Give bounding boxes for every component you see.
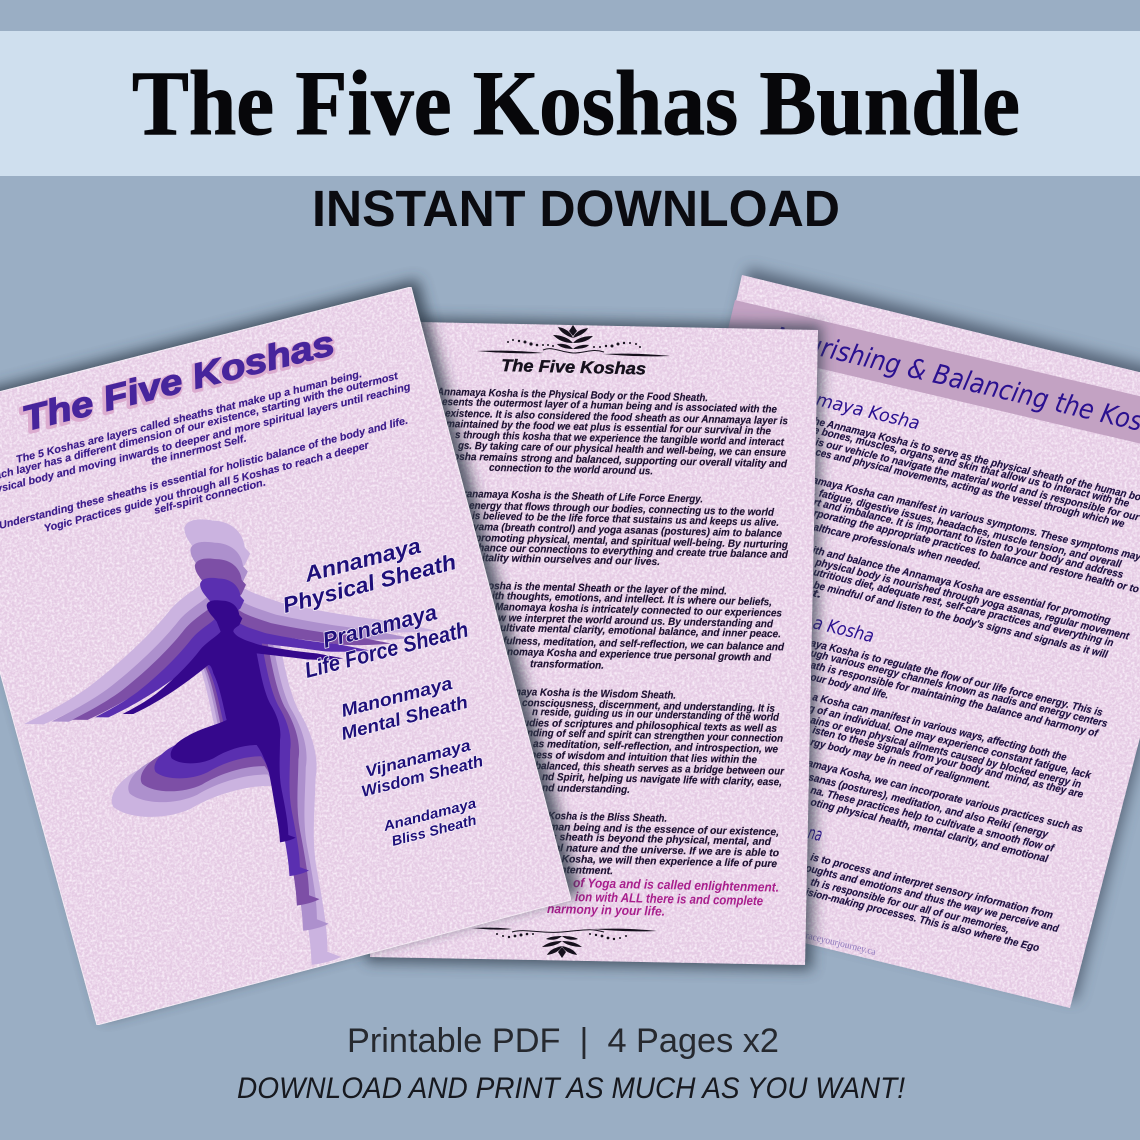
mini title: The Five Koshas — [501, 356, 646, 379]
text block: Anandamaya summary: Kosha is the Bliss Sheath. — [548, 810, 667, 825]
sheath labels: Anandamaya — [381, 795, 478, 834]
text block: Pranamaya: oting physical health, mental clarity, and emotional — [809, 796, 1050, 866]
intro text: Understanding these sheaths is essential for holistic balance of the body and life. — [0, 415, 409, 532]
section heading: Pranamaya Kosha: a Kosha — [811, 612, 876, 647]
text block: Vijnanamaya summary: n reside, guiding us in our understanding of the world — [532, 706, 780, 724]
sheath labels: Pranamaya — [320, 599, 440, 653]
text block: Vijnanamaya summary: nd Spirit, helping us navigate life with clarity, ease, — [542, 771, 782, 788]
text block: Pranamaya: isten to these signals from your body and mind, as they are — [811, 724, 1085, 801]
text block: Pranamaya: rgy body may be in need of realignment. — [809, 736, 992, 791]
sheath labels: Mental Sheath — [339, 692, 470, 744]
text block: Anandamaya summary: ntentment. — [560, 864, 613, 877]
text block: Pranamaya: ath is responsible for maintaining the balance and harmony of — [809, 659, 1100, 740]
text block: Annamaya: physical body is nourished through yoga asanas, regular movement — [813, 556, 1131, 643]
page title: The Five Koshas — [19, 324, 338, 439]
text block: Pranamaya: na. These practices help to cultivate a smooth flow of — [809, 784, 1056, 855]
ornament: top — [477, 325, 670, 356]
text block: Vijnanamaya summary — [515, 686, 785, 796]
page title: The Five Koshas — [17, 325, 338, 441]
text block: Manomaya summary: Manomaya kosha is intricately connected to our experiences — [495, 601, 782, 620]
text block: Annamaya summary: gs. By taking care of our physical health and well-being, we can ensure — [457, 440, 786, 459]
text block: Annamaya: utritious diet, adequate rest, self-care practices and everything in — [812, 566, 1115, 649]
text block: Pranamaya summary: energy that flows through our bodies, connecting us to the world — [469, 500, 775, 519]
text block: Annamaya: , fatigue, digestive issues, headaches, muscle tension, and overall — [811, 486, 1124, 571]
text block: Annamaya: be mindful of and listen to the body's signs and signals as it will — [812, 579, 1110, 661]
text block: Manomaya summary: nomaya Kosha and experience true personal growth and — [507, 646, 772, 664]
text block: Annamaya: rt and imbalance. It is important to listen to your body and address — [812, 496, 1125, 581]
text block: Annamaya summary: connection to the world around us. — [489, 462, 653, 477]
text block: Annamaya summary: existence. It is also considered the food sheath as our Annamaya layer is — [445, 408, 788, 427]
panel: middle page — [366, 318, 822, 970]
section heading: Manomaya fragment: na — [806, 822, 824, 846]
text block: Vijnanamaya summary: consciousness, discernment, and understanding. It is — [522, 697, 775, 715]
text block: Manomaya summary: transformation. — [530, 658, 604, 672]
sheath labels: Physical Sheath — [280, 549, 459, 618]
text block: Pranamaya: ains or even physical ailments caused by blocked energy in — [809, 714, 1082, 791]
heading band — [724, 300, 1140, 467]
text block: Anandamaya summary: uman being and is the essence of our existence, — [543, 821, 779, 838]
footer url: raceyourjourney.ca — [804, 930, 877, 958]
text block: Annamaya: althcare professionals when needed. — [812, 521, 983, 573]
text block: Annamaya summary: Annamaya Kosha is the Physical Body or the Food Sheath. — [436, 386, 708, 404]
text block: Anandamaya summary: ual nature and the universe. If we are is able to — [548, 842, 780, 859]
sheath labels: Life Force Sheath — [302, 617, 471, 683]
pink closing text: of Yoga and is called enlightenment. — [573, 875, 779, 895]
subtitle: INSTANT DOWNLOAD — [312, 180, 840, 237]
text block: Manomaya summary: ultivate mental clarity, emotional balance, and inner peace. — [500, 622, 781, 640]
text block: Annamaya summary: maintained by the food we eat plus is essential for our survival in the — [446, 418, 771, 437]
text block: Annamaya summary: s through this kosha that we experience the tangible world and interact — [455, 429, 785, 448]
sheath labels: Wisdom Sheath — [360, 753, 485, 801]
text block: Manomaya summary — [488, 580, 785, 672]
text block: Anandamaya summary: a Kosha, we will then experience a life of pure — [553, 853, 777, 870]
text block: Anandamaya summary: is sheath is beyond the physical, mental, and — [548, 831, 772, 848]
intro text: Yogic Practices guide you through all 5 Koshas to reach a deeper — [43, 439, 371, 535]
text block: Pranamaya: our body and life. — [809, 671, 890, 702]
text block: Vijnanamaya summary: udies of scriptures and philosophical texts as well as — [523, 717, 777, 735]
text block: Manomaya: th is responsible for our all of our memories, — [809, 876, 1010, 936]
text block: Annamaya summary: esents the outermost layer of a human being and is associated with the — [442, 396, 777, 416]
figure: layered silhouette in tree pose — [19, 516, 439, 967]
text block: Pranamaya summary: ranamaya Kosha is the Sheath of Life Force Energy. — [463, 488, 703, 505]
ornament: bottom — [472, 928, 657, 958]
intro text: the innermost Self. — [150, 433, 248, 468]
text block: Pranamaya: sanas (postures), meditation, and also Reiki (energy — [807, 771, 1050, 841]
text block: Annamaya — [811, 415, 1140, 661]
text block: Pranamaya summary: promoting physical, mental, and spiritual well-being. By nurturing — [474, 532, 789, 551]
caption: format: Printable PDF | 4 Pages x2 — [347, 1022, 779, 1060]
text block: Vijnanamaya summary: ness of wisdom and intuition that lies within the — [530, 749, 757, 766]
sheath labels: Annamaya — [301, 533, 423, 587]
sheath labels: Manonmaya — [339, 673, 454, 721]
text block: Anandamaya summary — [543, 810, 780, 877]
text block: Pranamaya: amaya Kosha, we can incorporate various practices such as — [806, 757, 1084, 835]
text block: Vijnanamaya summary: as meditation, self-reflection, and introspection, we — [533, 738, 778, 756]
intro text — [0, 368, 412, 535]
intro text: The 5 Koshas are layers called sheaths that make up a human being. — [15, 368, 363, 466]
text block: Pranamaya: a Kosha can manifest in various ways, affecting both the — [811, 691, 1068, 764]
caption: call to action: DOWNLOAD AND PRINT AS MUCH AS YOU WANT! — [237, 1072, 906, 1105]
text block: Pranamaya summary: yama (breath control) and yoga asanas (postures) aim to balance — [472, 521, 782, 540]
text block: Annamaya summary — [436, 386, 788, 477]
text block: Manomaya summary: fulness, meditation, and self-reflection, we can balance and — [503, 635, 785, 653]
panel: left page — [0, 279, 580, 1025]
text block: Manomaya: ision-making processes. This is also where the Ego — [804, 886, 1041, 954]
text block: Pranamaya — [806, 637, 1109, 866]
text block: Annamaya: e bones, muscles, organs, and skin that allow us to interact with the — [812, 424, 1131, 510]
text block: Pranamaya: aya Kosha is to regulate the flow of our life force energy. This is — [809, 637, 1104, 719]
pink closing text: ion with ALL there is and complete — [575, 889, 763, 908]
panel: right page — [600, 268, 1140, 1008]
text block: Pranamaya summary — [463, 488, 789, 568]
sheath labels — [280, 533, 485, 849]
sheath labels: Bliss Sheath — [390, 812, 478, 849]
text block: Manomaya summary: w we interpret the world around us. By understanding and — [498, 612, 774, 630]
text block: Annamaya summary: osha remains strong and balanced, supporting our overall vitality and — [453, 451, 788, 470]
pink closing text — [547, 875, 779, 919]
header band with title — [0, 31, 1140, 176]
text block: Manomaya summary: ith thoughts, emotions, and intellect. It is where our beliefs, — [492, 590, 772, 608]
text block: Vijnanamaya summary: balanced, this sheath serves as a bridge between our — [535, 760, 785, 778]
text block: Vijnanamaya summary: nd understanding. — [542, 782, 630, 796]
header band with title: The Five Koshas Bundle — [132, 52, 1020, 154]
text block: Vijnanamaya summary: naya Kosha is the Wisdom Sheath. — [515, 686, 676, 702]
intro text: self-spirit connection. — [153, 476, 267, 517]
text block: Pranamaya: ugh various energy channels known as nadis and energy centers — [809, 647, 1109, 730]
pink closing text: harmony in your life. — [547, 901, 665, 919]
sheath labels: Vijnanamaya — [364, 737, 473, 781]
text block: Pranamaya summary: is believed to be the life force that sustains us and keeps us alive. — [472, 510, 779, 529]
text block: Manomaya summary: osha is the mental Sheath or the layer of the mind. — [488, 580, 727, 597]
text block: Annamaya: t. — [811, 587, 823, 601]
text block: Pranamaya summary: itality within ourselves and our lives. — [482, 552, 660, 568]
text block: Vijnanamaya summary: nding of self and spirit can strengthen your connection — [527, 727, 783, 745]
text block: Annamaya: ith and balance the Annamaya Kosha are essential for promoting — [811, 544, 1112, 627]
section heading: Annamaya Kosha: maya Kosha — [814, 389, 922, 434]
text block: Pranamaya: g of an individual. One may experience constant fatigue, lack — [806, 702, 1093, 782]
text block: Manomaya: oughts and emotions and thus the way we perceive and — [804, 862, 1060, 935]
text block: Pranamaya summary: hance our connections to everything and create true balance and — [478, 542, 789, 561]
text block: Manomaya: is to process and interpret sensory information from — [809, 851, 1054, 921]
